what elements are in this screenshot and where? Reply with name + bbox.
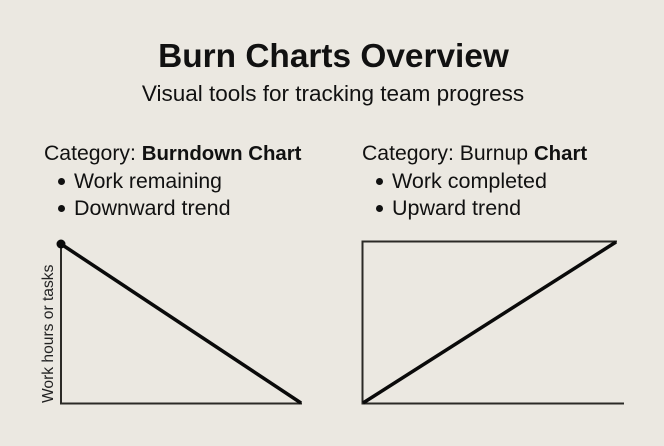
subtitle: Visual tools for tracking team progress: [142, 81, 524, 106]
title: Burn Charts Overview: [158, 38, 509, 75]
downward trend line: [61, 244, 301, 403]
bullet: work remaining: Work remaining: [74, 170, 222, 193]
heading: burndown category: Category: Burndown Chart: [44, 142, 301, 165]
panel: burndown text: [44, 142, 302, 220]
burndown chart: [40, 240, 302, 404]
bullet: upward trend: Upward trend: [392, 196, 521, 220]
axes and top boundary: [362, 242, 624, 404]
upward trend line: [363, 242, 616, 403]
panel: burnup text: [362, 142, 587, 220]
bullet: downward trend: Downward trend: [74, 196, 231, 220]
heading: burnup category: Category: Burnup Chart: [362, 142, 587, 165]
burnup chart: [362, 242, 624, 404]
start point: [56, 240, 66, 248]
y-axis label: Work hours or tasks: [40, 264, 57, 403]
axes: [61, 244, 302, 404]
bullet: work completed: Work completed: [392, 169, 547, 193]
